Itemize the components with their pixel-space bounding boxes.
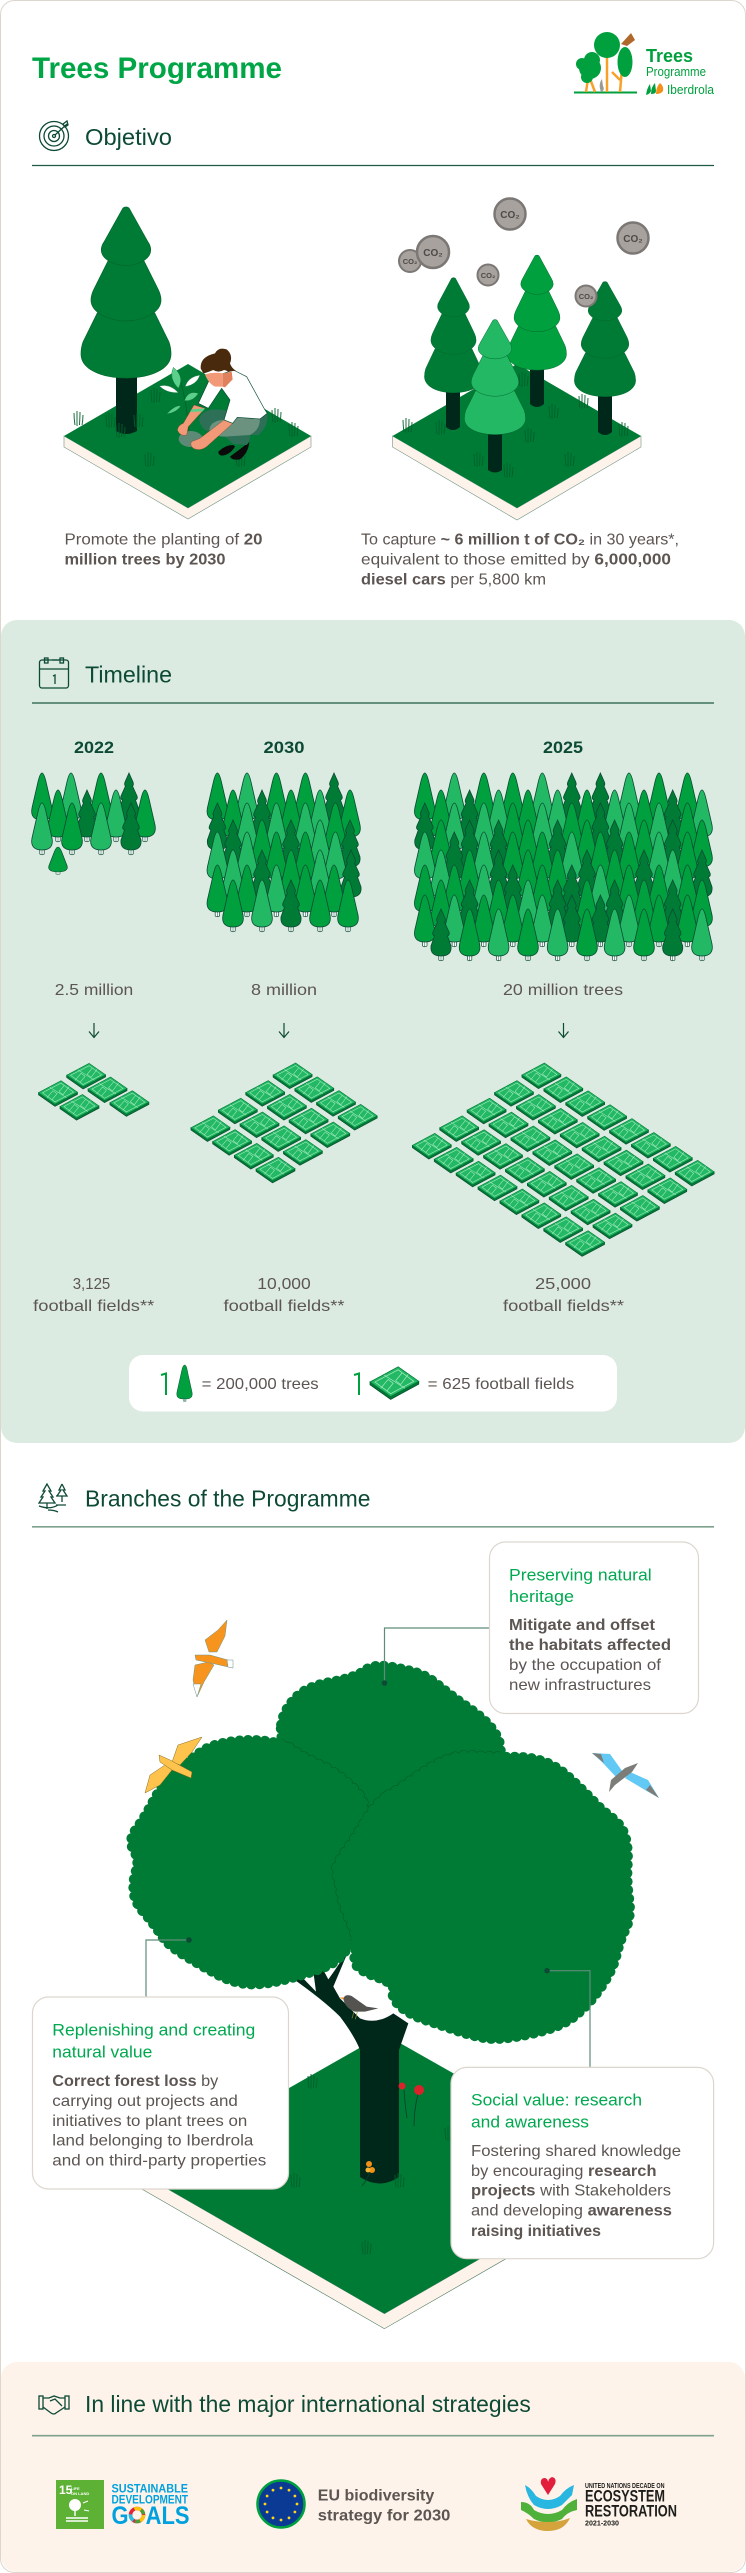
text: planting goal: Promote the planting of 20 (64, 532, 263, 548)
callout: replenishing and creating natural value: Correct forest loss by (52, 2073, 218, 2090)
forest: 2.5 million trees (32, 773, 155, 875)
section heading: Objetivo: Objetivo (85, 124, 172, 150)
CO2 bubbles: CO₂ (623, 234, 643, 245)
callout: social value: and awareness (471, 2112, 589, 2132)
trees (424, 255, 636, 472)
illustration: forest capturing CO2 (392, 198, 648, 520)
isometric ground (64, 364, 311, 519)
trunk and branches (290, 1955, 408, 2183)
legend (129, 1355, 617, 1412)
year labels (74, 738, 583, 757)
grass tufts (403, 372, 628, 478)
CO2 bubbles: CO₂ (579, 292, 593, 301)
logo: SDG 15 and Sustainable Development Goals (56, 2480, 190, 2530)
logo: SDG 15 and Sustainable Development Goals: DEVELOPMENT (112, 2492, 189, 2506)
logo: UN Decade on Ecosystem Restoration: UNITED NATIONS DECADE ON (585, 2481, 664, 2490)
callout: social value: projects with Stakeholders (471, 2183, 671, 2200)
section heading: Branches of the Programme: Branches of the Programme (85, 1485, 370, 1511)
illustration: tree and woman planting (64, 207, 311, 519)
CO2 bubbles: CO₂ (500, 210, 520, 221)
CO2 bubbles: CO₂ (481, 271, 495, 280)
tree count labels (55, 982, 623, 999)
seedling (159, 367, 200, 435)
callout: social value: raising initiatives (471, 2223, 601, 2240)
text: capture goal (361, 532, 679, 588)
arrows: trees to fields (89, 1023, 568, 1038)
logo: SDG 15 and Sustainable Development Goals: 15 (59, 2483, 73, 2497)
icon: calendar (40, 658, 68, 688)
callout: social value: and developing awareness (471, 2203, 672, 2220)
callout: replenishing and creating natural value (32, 1997, 288, 2189)
forest: 8 million trees (207, 773, 361, 932)
logo: Trees Programme Iberdrola: Programme (646, 65, 706, 79)
callout: preserving natural heritage: heritage (509, 1587, 574, 1606)
callout: preserving natural heritage: by the occupation of (509, 1657, 662, 1674)
grass tufts (74, 388, 298, 467)
text: planting goal line 2: million trees by 2030 (64, 552, 226, 568)
logo: UN Decade on Ecosystem Restoration (521, 2477, 677, 2531)
callout: preserving natural heritage: the habitats affected (509, 1637, 671, 1654)
callout: social value: Fostering shared knowledge (471, 2143, 681, 2160)
football fields: 25,000 (412, 1063, 714, 1256)
callout: preserving natural heritage: Mitigate and offset (509, 1617, 656, 1634)
field count labels: football fields** (224, 1298, 344, 1315)
section heading: strategies: In line with the major international strategies (85, 2391, 531, 2417)
callout: replenishing and creating natural value: and on third-party properties (52, 2153, 266, 2170)
CO2 bubbles: CO₂ (423, 248, 443, 259)
field count labels: football fields** (503, 1298, 624, 1315)
logo: EU biodiversity strategy: strategy for 2030 (318, 2508, 451, 2525)
icon: target (40, 121, 68, 150)
tree count labels: 8 million (251, 982, 317, 999)
field count labels: football fields** (33, 1298, 154, 1315)
logo: SDG 15 and Sustainable Development Goals: SUSTAINABLE (112, 2482, 188, 2496)
panel: timeline (1, 620, 745, 1443)
forest: 20 million trees (414, 773, 712, 961)
callout: replenishing and creating natural value: natural value (52, 2042, 152, 2062)
legend: field equivalence: = 625 football fields (428, 1376, 574, 1393)
bird: blue (592, 1753, 659, 1798)
text: capture goal: equivalent to those emitted by 6,000,000 (361, 552, 671, 568)
football fields: 3,125 (38, 1063, 149, 1120)
icon: trees (39, 1484, 67, 1512)
callout: replenishing and creating natural value: land belonging to Iberdrola (52, 2133, 253, 2150)
tall tree (81, 207, 171, 434)
text: capture goal: diesel cars per 5,800 km (361, 572, 546, 588)
callout: preserving natural heritage: new infrastructures (509, 1677, 651, 1694)
callout: social value: Social value: research (471, 2091, 642, 2110)
callout: preserving natural heritage (490, 1542, 698, 1714)
bird: orange (193, 1620, 233, 1697)
logo: SDG 15 and Sustainable Development Goals: ON LAND (71, 2491, 89, 2496)
section heading: Timeline (32, 658, 714, 703)
callout: replenishing and creating natural value: initiatives to plant trees on (52, 2113, 247, 2130)
field count labels: 3,125 (73, 1276, 110, 1293)
legend: tree equivalence: = 200,000 trees (202, 1376, 319, 1393)
logo: SDG 15 and Sustainable Development Goals: GOALS (112, 2502, 190, 2530)
section heading: Objetivo (32, 121, 714, 166)
logo: UN Decade on Ecosystem Restoration: RESTORATION (585, 2502, 677, 2521)
logo: Trees Programme Iberdrola (574, 32, 715, 97)
callout: preserving natural heritage: Preserving natural (509, 1566, 652, 1585)
callout: replenishing and creating natural value: Replenishing and creating (52, 2021, 255, 2040)
title: Trees Programme (32, 52, 282, 85)
panel: international strategies (1, 2362, 745, 2572)
logo: UN Decade on Ecosystem Restoration: ECOSYSTEM (585, 2487, 665, 2506)
section heading: strategies (32, 2391, 714, 2436)
seedling and woman gardening (159, 349, 267, 460)
section heading: Branches of the Programme (32, 1484, 714, 1527)
logo: EU biodiversity strategy (258, 2480, 451, 2528)
CO2 bubbles (399, 198, 648, 306)
woman (177, 349, 267, 460)
logo: EU biodiversity strategy: EU biodiversity (318, 2488, 434, 2505)
isometric ground (140, 2034, 629, 2329)
legend: field equivalence (354, 1367, 574, 1399)
canopy (131, 1666, 630, 2039)
CO2 bubbles: CO₂ (403, 257, 417, 266)
bird: yellow (145, 1737, 202, 1793)
legend: tree equivalence (161, 1365, 319, 1402)
bird: small grey on branch (340, 1995, 378, 2019)
football fields: 10,000 (191, 1063, 377, 1183)
icon: handshake (39, 2396, 69, 2414)
illustration: big tree on ground (131, 1620, 659, 2329)
isometric ground (392, 364, 641, 520)
logo: Trees Programme Iberdrola: Iberdrola (667, 82, 715, 97)
year labels: 2025 (543, 738, 583, 757)
callout: social value: by encouraging research (471, 2163, 656, 2180)
callout connectors (146, 1628, 590, 2068)
field count labels: 10,000 (257, 1276, 311, 1293)
year labels: 2030 (264, 738, 304, 757)
logo: SDG 15 and Sustainable Development Goals: LIFE (71, 2486, 80, 2491)
tree count labels: 20 million trees (503, 982, 623, 999)
grass and flowers (291, 2074, 454, 2255)
section heading: Timeline: Timeline (85, 662, 172, 688)
tree count labels: 2.5 million (55, 982, 133, 999)
year labels: 2022 (74, 738, 114, 757)
field count labels (33, 1276, 624, 1315)
field count labels: 25,000 (535, 1276, 591, 1293)
callout: social value (451, 2067, 714, 2259)
logo: UN Decade on Ecosystem Restoration: 2021-2030 (585, 2518, 619, 2528)
text: capture goal: To capture ~ 6 million t of CO₂ in 30 years*, (361, 532, 679, 548)
callout: replenishing and creating natural value: carrying out projects and (52, 2093, 238, 2110)
logo: Trees Programme Iberdrola: Trees (646, 46, 693, 66)
